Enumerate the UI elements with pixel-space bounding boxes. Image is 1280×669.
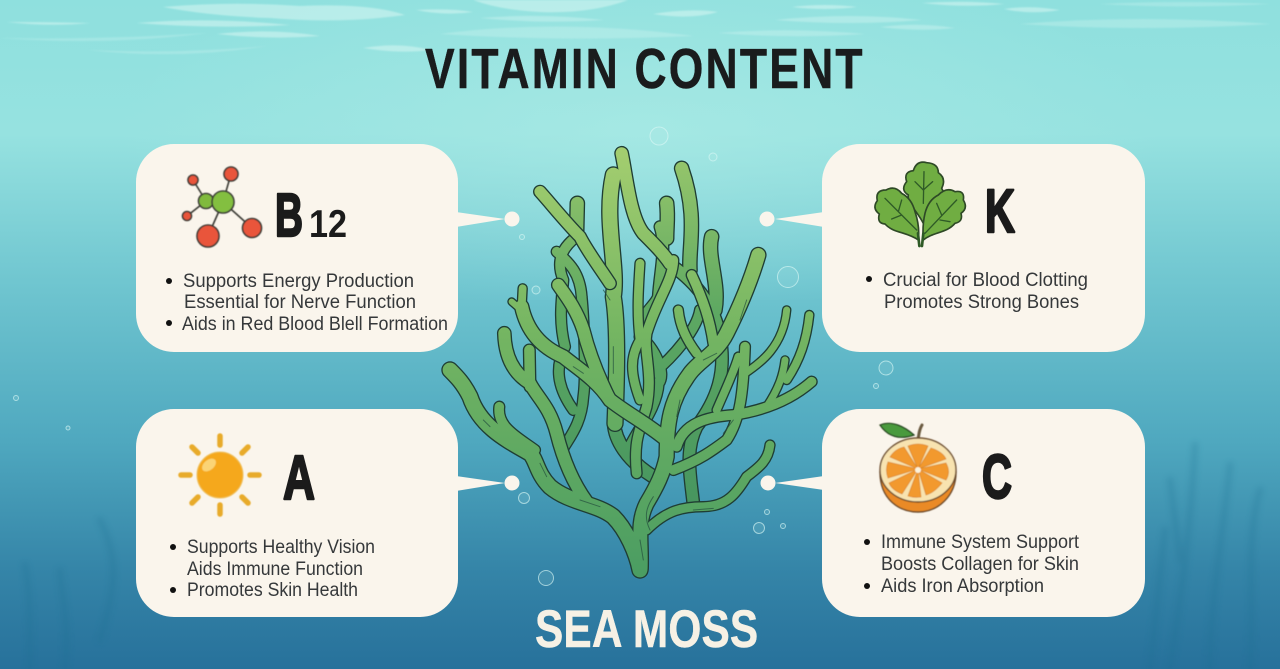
benefits list B12: Supports Energy Production — [183, 271, 414, 292]
background bubbles — [14, 127, 893, 586]
panel: vitamin C — [760, 409, 1145, 617]
distant seaweed silhouettes — [25, 445, 1260, 669]
icon: sun — [181, 436, 259, 514]
panel: vitamin B12 — [136, 144, 520, 352]
benefits list A — [170, 537, 375, 601]
card C — [822, 409, 1145, 617]
callout pointer C — [760, 476, 824, 490]
icon: leaves — [875, 162, 965, 246]
callout pointer A — [456, 476, 520, 491]
panel: vitamin K — [760, 144, 1145, 352]
heading A: A — [283, 444, 315, 513]
surface ripples — [0, 0, 1270, 54]
illustration: sea moss — [450, 153, 812, 570]
card K — [822, 144, 1145, 352]
title: VITAMIN CONTENT — [425, 37, 863, 100]
benefits list C: Aids Iron Absorption — [881, 576, 1044, 597]
benefits list A: Aids Immune Function — [187, 559, 363, 580]
heading K: K — [985, 177, 1015, 245]
benefits list A: Supports Healthy Vision — [187, 537, 375, 558]
benefits list A: Promotes Skin Health — [187, 580, 358, 601]
callout pointer B12 — [456, 212, 520, 227]
benefits list C: Immune System Support — [881, 532, 1080, 553]
card B12 — [136, 144, 458, 352]
heading B12 — [275, 181, 347, 249]
benefits list C: Boosts Collagen for Skin — [881, 554, 1079, 575]
icon: orange — [880, 423, 956, 512]
card A — [136, 409, 458, 617]
heading C: C — [982, 443, 1012, 512]
benefits list K — [866, 270, 1088, 313]
callout pointer K — [760, 212, 824, 227]
benefits list K: Promotes Strong Bones — [884, 292, 1079, 313]
panel: vitamin A — [136, 409, 520, 617]
benefits list K: Crucial for Blood Clotting — [883, 270, 1088, 291]
footer label: sea moss: SEA MOSS — [535, 601, 758, 659]
benefits list B12: Aids in Red Blood Blell Formation — [182, 314, 448, 335]
benefits list B12: Essential for Nerve Function — [184, 292, 416, 313]
icon: molecule — [182, 167, 262, 247]
benefits list C — [864, 532, 1080, 597]
benefits list B12 — [166, 271, 448, 335]
heading B12: 12 — [309, 203, 347, 246]
heading B12: B — [275, 181, 303, 249]
